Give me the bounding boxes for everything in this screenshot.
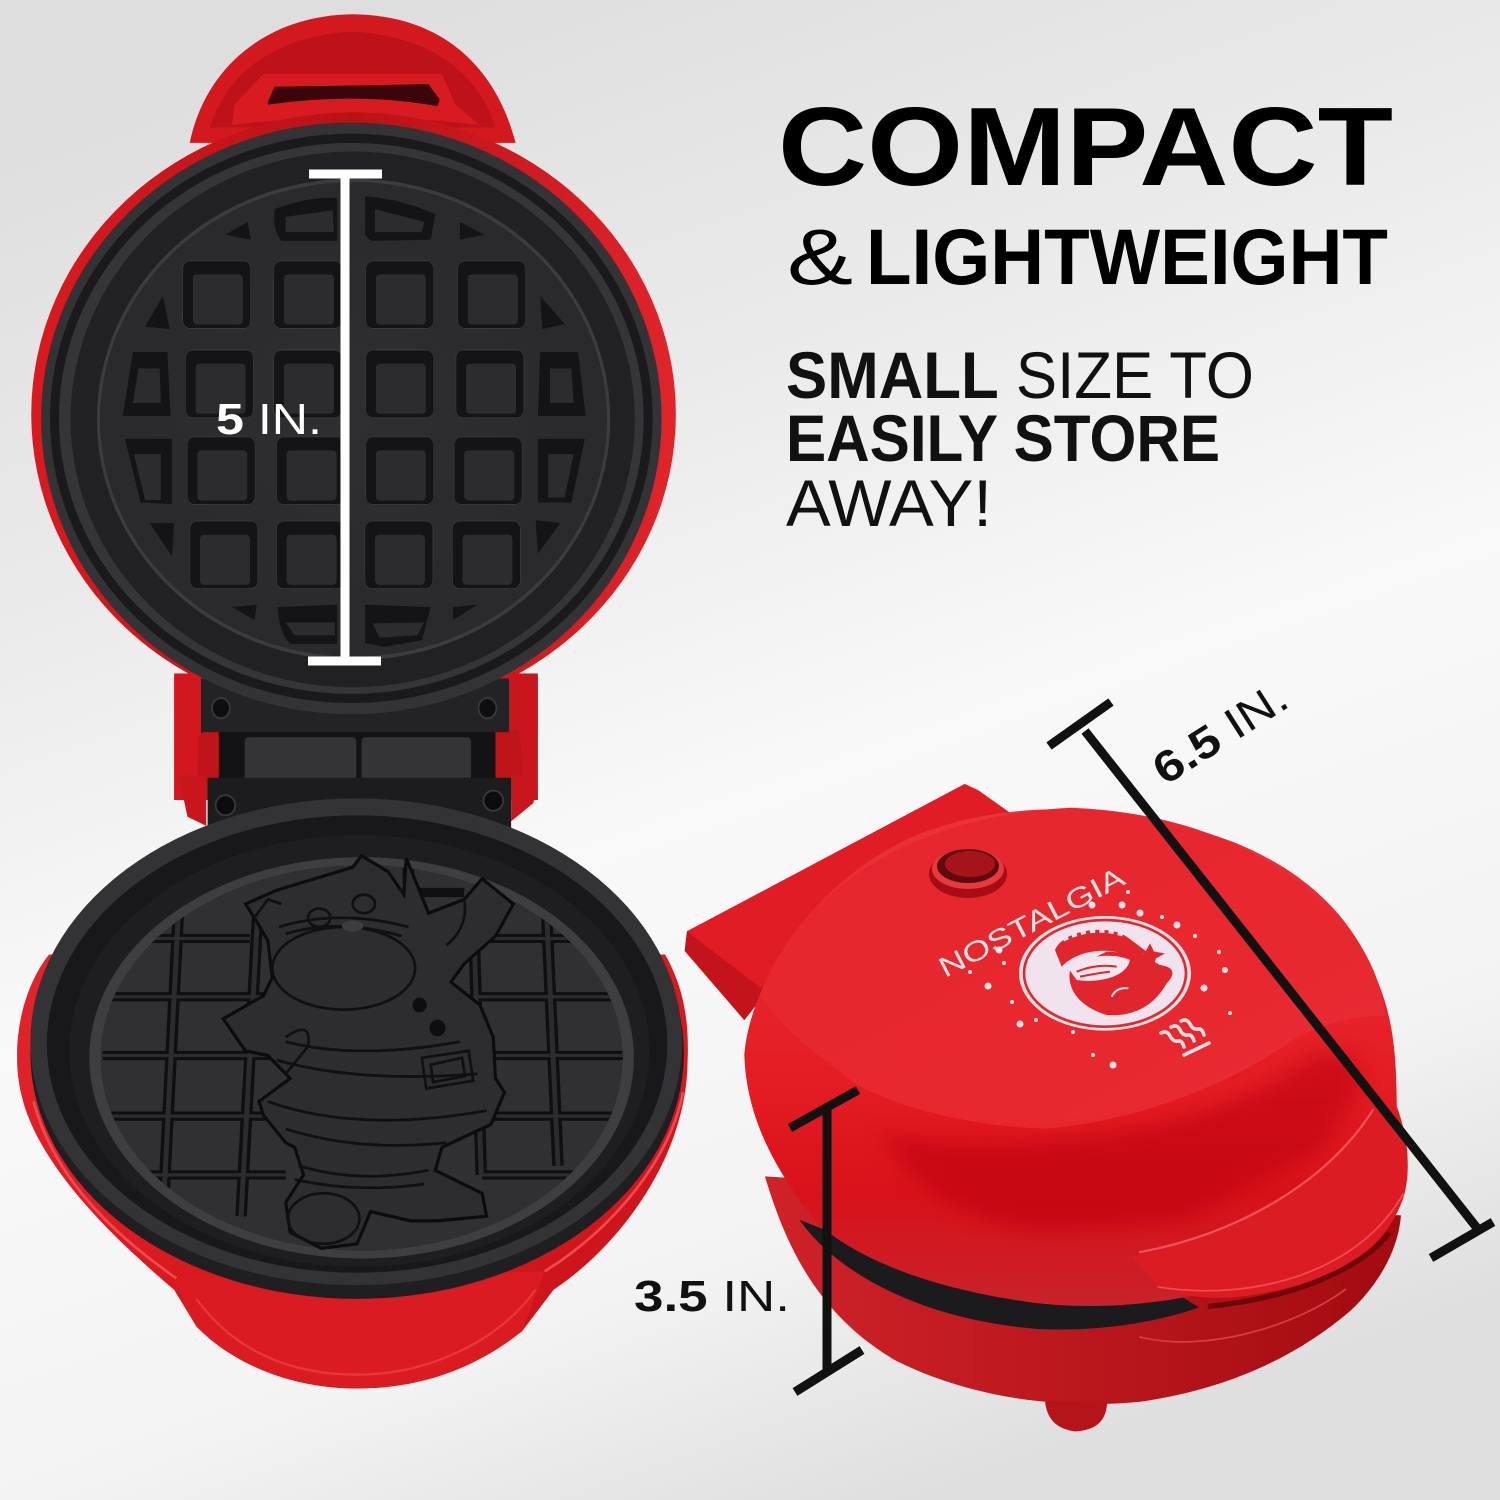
waffle grid bbox=[103, 858, 625, 1216]
dimension: 5 in bbox=[308, 173, 382, 661]
body text: EASILY STORE bbox=[786, 401, 1220, 475]
front handle bbox=[174, 1271, 545, 1388]
handle tab bbox=[232, 74, 480, 125]
dimension: 6.5 in bbox=[1049, 702, 1493, 1258]
lid shadow bbox=[882, 1053, 1360, 1233]
mount screws bbox=[216, 791, 503, 815]
outer ring bbox=[41, 122, 662, 714]
hinge barrel bbox=[245, 737, 471, 800]
inner hinge red right bbox=[496, 730, 522, 800]
base bbox=[765, 1176, 1401, 1404]
body text: SMALL SIZE TO bbox=[786, 338, 1254, 412]
heading bbox=[778, 85, 1393, 301]
lower red bracket right bbox=[511, 775, 538, 821]
waffle plate bbox=[97, 179, 610, 660]
dimension: 3.5 in bbox=[790, 1090, 862, 1392]
heading: COMPACT bbox=[778, 85, 1393, 209]
front handle bbox=[1132, 1105, 1408, 1298]
lower red bracket left bbox=[179, 775, 206, 826]
santa logo bbox=[1019, 916, 1191, 1031]
rear handle side bbox=[685, 931, 772, 1020]
subheading: LIGHTWEIGHT bbox=[866, 212, 1388, 301]
hinge screw right bbox=[479, 698, 496, 718]
open waffle maker: top plate bbox=[31, 14, 676, 800]
label: 5 in: 5 IN. bbox=[216, 395, 322, 444]
base seam bbox=[1139, 1289, 1346, 1342]
santa details bbox=[254, 895, 487, 1244]
label: 3.5 in: 3.5 IN. bbox=[634, 1272, 790, 1321]
closed waffle maker bbox=[685, 784, 1408, 1431]
subheading: & bbox=[787, 212, 853, 301]
indicator light bbox=[929, 849, 1007, 898]
top handle bbox=[190, 14, 516, 143]
hinge mount bbox=[201, 679, 509, 732]
lid flat top bbox=[760, 808, 1385, 1129]
open waffle maker: bottom plate bbox=[17, 775, 688, 1388]
snow dots bbox=[968, 890, 1232, 1068]
heat icon bbox=[1161, 1020, 1209, 1055]
inner hinge red left bbox=[196, 730, 219, 800]
handle gap bbox=[1208, 1233, 1389, 1306]
dark waffle gap bbox=[799, 1220, 1199, 1330]
waffle squares bbox=[123, 196, 586, 647]
bottom red shell bbox=[17, 954, 688, 1388]
top red shell bbox=[31, 112, 676, 716]
santa figure bbox=[223, 856, 513, 1248]
foot bbox=[1045, 1401, 1107, 1431]
body text: AWAY! bbox=[786, 466, 992, 540]
hinge screw left bbox=[212, 698, 230, 718]
outer ring bbox=[30, 808, 684, 1299]
inner channel bbox=[69, 835, 650, 1267]
brand text: NOSTALGIA bbox=[933, 861, 1130, 983]
rear handle top bbox=[687, 784, 1015, 988]
right hinge bracket bbox=[509, 673, 538, 800]
santa buttons bbox=[342, 921, 446, 1036]
body text bbox=[786, 338, 1254, 540]
waffle plate bbox=[89, 857, 634, 1258]
hinge backing bbox=[201, 679, 509, 800]
lid dome bbox=[744, 809, 1397, 1306]
bottom hinge mount bbox=[208, 778, 511, 831]
rim highlight bbox=[33, 1092, 683, 1278]
left hinge bracket bbox=[174, 673, 201, 800]
label: 6.5 in: 6.5 IN. bbox=[1144, 673, 1297, 794]
